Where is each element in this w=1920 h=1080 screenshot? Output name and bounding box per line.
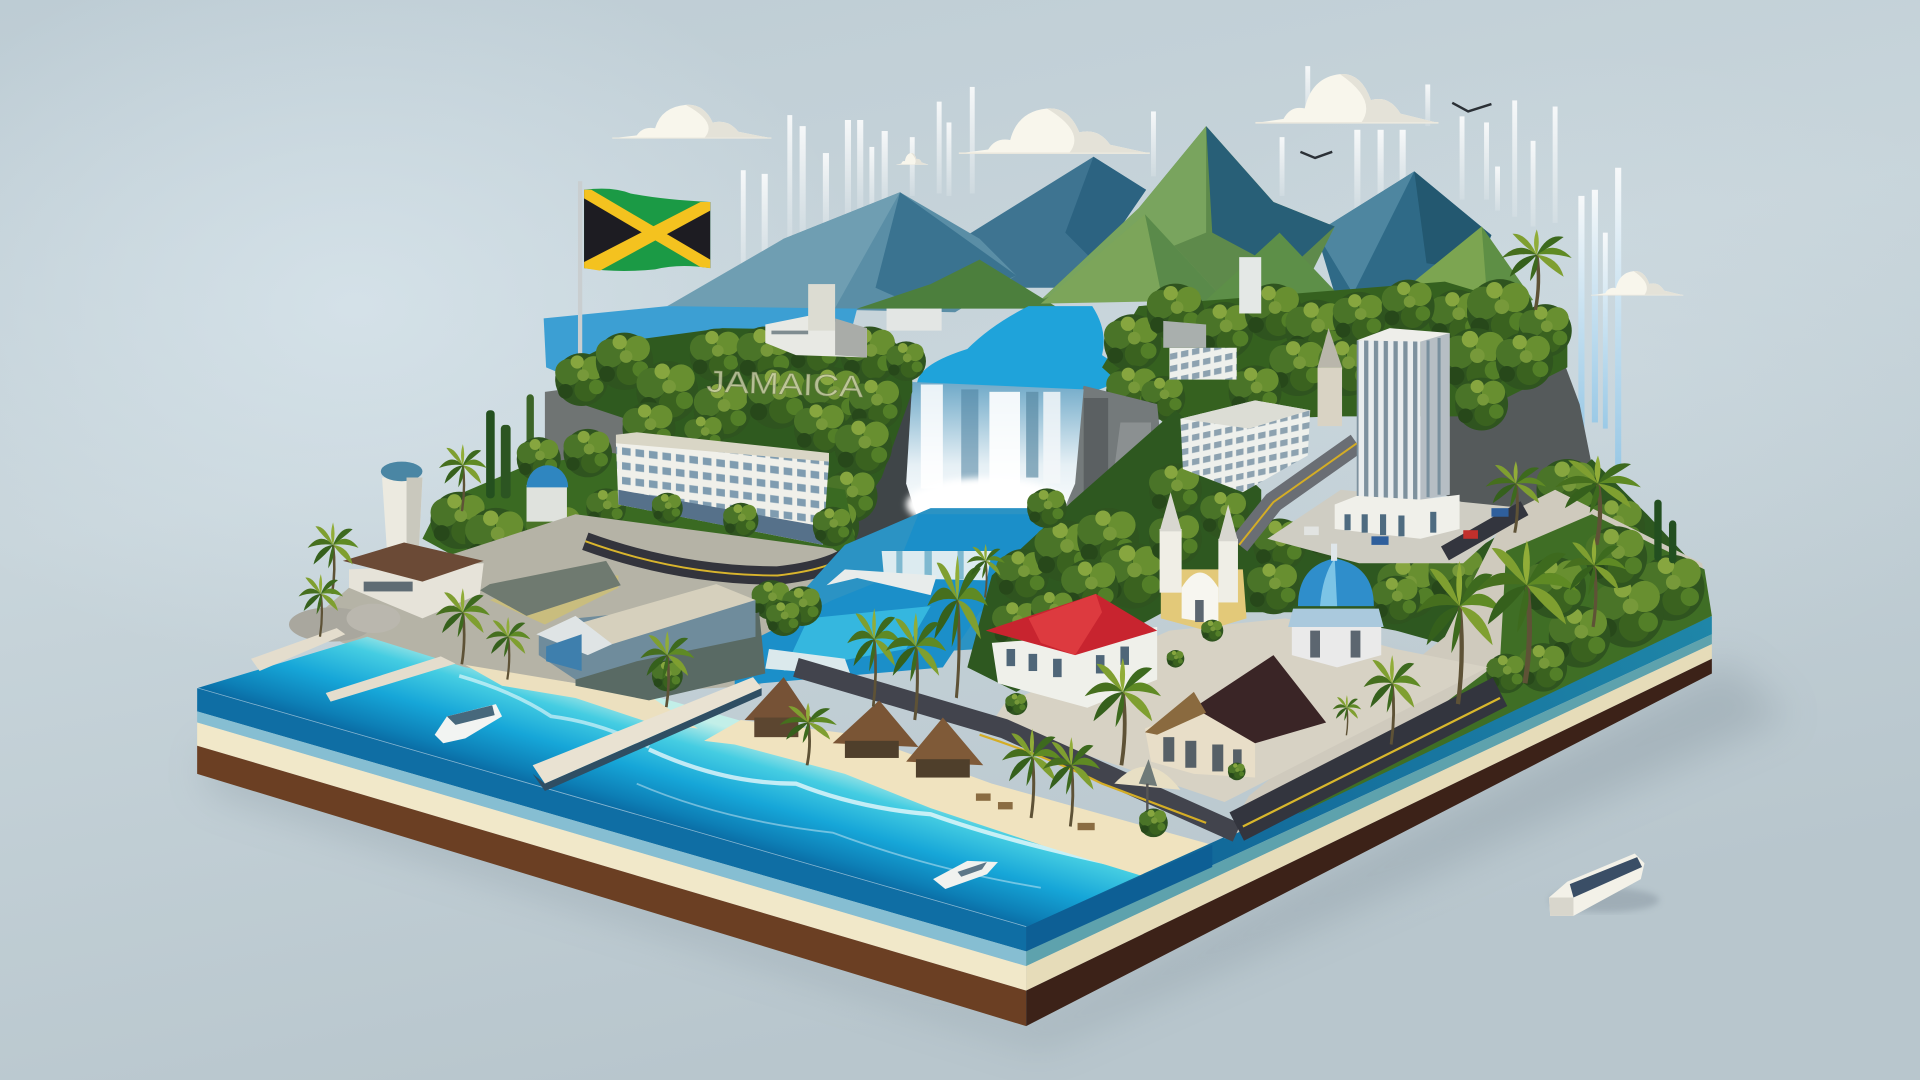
waterfall <box>906 382 1084 531</box>
waterfall cliffs <box>545 380 1163 551</box>
bridge <box>827 569 937 595</box>
water corner wedge on right <box>1026 845 1212 951</box>
vertical white data lines <box>741 66 1621 465</box>
birds <box>1300 103 1491 158</box>
hotel <box>616 432 829 545</box>
slab shadow <box>208 661 1788 1047</box>
lighthouse <box>381 462 422 551</box>
water top surface <box>197 637 1206 927</box>
office building <box>1180 400 1310 492</box>
boat near corner <box>933 861 998 889</box>
beach umbrella <box>1114 759 1180 813</box>
thatched beach huts <box>744 677 983 778</box>
lower river and pool <box>735 508 1078 686</box>
flag of Jamaica <box>578 181 710 367</box>
slab right face layers <box>1026 616 1712 1026</box>
land behind hotel and left forest <box>422 394 857 576</box>
hotel-front trees <box>652 493 852 546</box>
lake above the waterfall <box>917 306 1120 392</box>
church-side foliage <box>992 488 1420 649</box>
small hill building <box>1163 321 1237 380</box>
tall office tower <box>1335 328 1460 539</box>
slope foliage behind church <box>967 410 1704 692</box>
spire <box>1318 328 1342 426</box>
river-side tree grove <box>752 580 822 636</box>
small blue dome tower <box>527 465 568 522</box>
piers <box>251 628 762 791</box>
church <box>1160 492 1247 631</box>
upper winding road <box>1239 443 1357 545</box>
left brown roof house <box>343 542 484 618</box>
blue dome building <box>1288 544 1384 667</box>
dark roof house <box>1145 655 1326 778</box>
sea behind island <box>544 306 857 380</box>
beach loungers and shrubs <box>976 620 1246 837</box>
right land edge foliage <box>1224 490 1712 839</box>
castle on the hill <box>765 284 942 358</box>
JAMAICA sign: JAMAICA <box>706 365 865 404</box>
beach <box>465 665 1212 877</box>
tower plaza <box>1267 490 1524 563</box>
slab left face layers <box>197 688 1026 1026</box>
boat in bay <box>435 704 502 743</box>
right forest and cliff backdrop <box>1102 279 1604 527</box>
large pier pavilion <box>536 584 765 700</box>
main coastal road <box>796 667 1500 833</box>
red roof house <box>986 594 1157 708</box>
left road <box>585 541 855 576</box>
narrow tower <box>1239 257 1261 313</box>
palm trees <box>299 229 1641 827</box>
main plaza ground <box>992 618 1488 802</box>
long grey roof building <box>480 561 621 624</box>
left plaza ground <box>306 514 857 692</box>
loose boat on the ground <box>1549 853 1659 916</box>
left rocky shore <box>289 604 400 642</box>
surf lines <box>197 676 1151 927</box>
left hilltop forest <box>555 323 926 553</box>
clouds <box>612 74 1683 296</box>
mountains <box>667 126 1533 331</box>
